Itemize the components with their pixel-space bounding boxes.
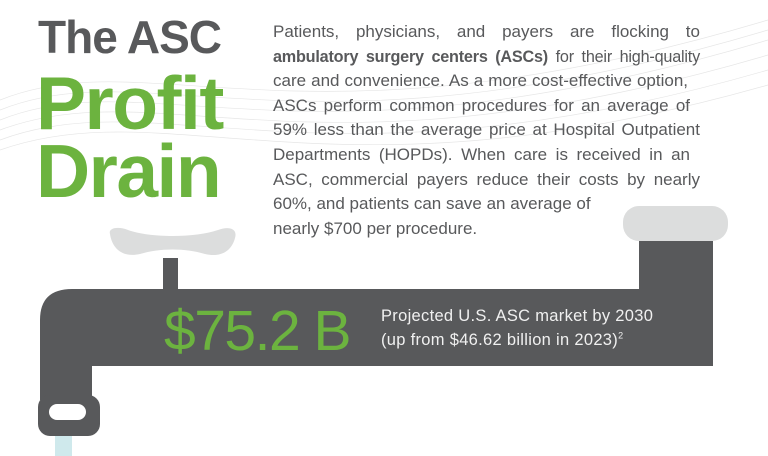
nozzle: [38, 395, 100, 436]
title: Drain: [36, 129, 220, 213]
intro text: Patients, physicians, and payers are flocking to: [273, 22, 700, 41]
nozzle slot: [49, 404, 86, 420]
valve stem: [163, 258, 178, 292]
title: Profit: [36, 61, 223, 145]
title: [36, 11, 224, 213]
intro text: care and convenience. As a more cost-effective option,: [273, 71, 688, 90]
intro text: ambulatory surgery centers (ASCs) for their high-quality: [273, 48, 700, 66]
intro text: ASCs perform common procedures for an average of: [273, 96, 690, 115]
big number: $75.2 B: [164, 299, 350, 363]
intro text: nearly $700 per procedure.: [273, 219, 477, 238]
valve handle: [110, 228, 236, 255]
intro text: [273, 22, 700, 238]
intro text: 59% less than the average price at Hospital Outpatient: [273, 120, 700, 139]
market caption: Projected U.S. ASC market by 2030: [381, 307, 653, 325]
intro text: Departments (HOPDs). When care is received in an: [273, 145, 690, 164]
right cap: [623, 206, 728, 241]
intro text: ASC, commercial payers reduce their costs by nearly: [273, 170, 700, 189]
market caption: [381, 307, 653, 349]
water stream: [55, 434, 72, 456]
title: The ASC: [38, 11, 221, 63]
intro text: 60%, and patients can save an average of: [273, 194, 591, 213]
pipe body: [40, 241, 713, 400]
market caption: (up from $46.62 billion in 2023)2: [381, 330, 623, 349]
